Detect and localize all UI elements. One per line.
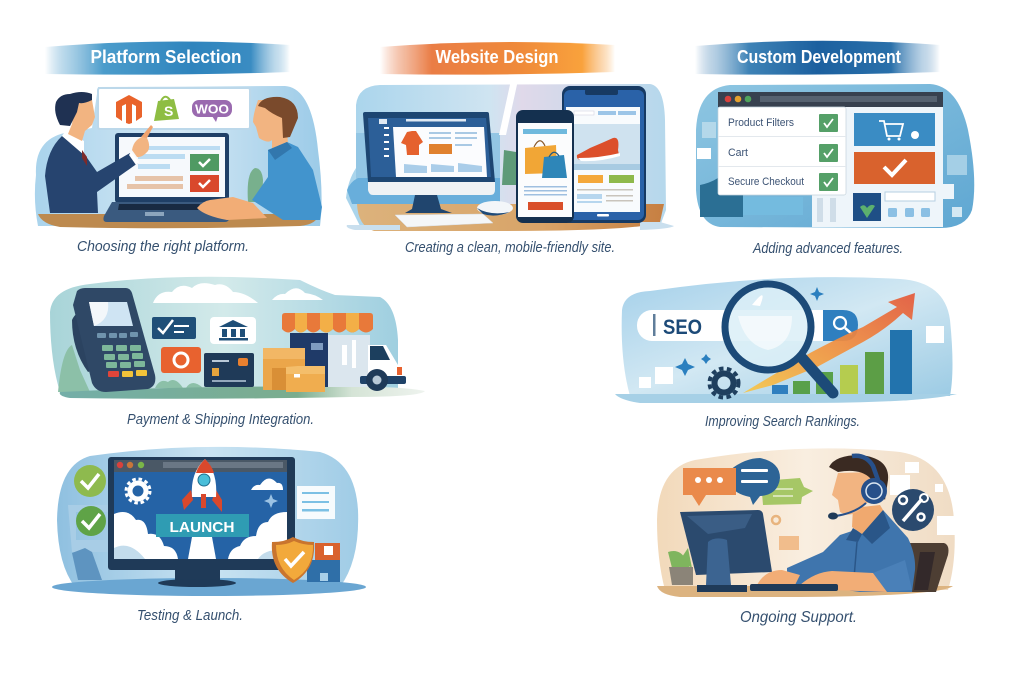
ground	[615, 394, 957, 403]
chat bubbles	[683, 458, 813, 506]
cardboard boxes	[263, 348, 325, 392]
heading: Custom Development	[695, 41, 940, 75]
caption: Ongoing Support.	[740, 609, 857, 626]
launch button	[156, 514, 249, 537]
icon: verified check card	[152, 317, 196, 339]
illustration background	[50, 277, 398, 392]
icon: gear	[710, 368, 738, 398]
caption: Choosing the right platform.	[77, 238, 249, 255]
panel: platform selection	[35, 41, 322, 255]
icon: shopify bag: S	[164, 103, 173, 119]
illustration background	[657, 448, 955, 590]
keyboard	[395, 214, 493, 227]
heading: Website Design	[380, 42, 615, 75]
illustration background	[346, 84, 666, 226]
books backdrop	[68, 505, 108, 580]
caption: Creating a clean, mobile-friendly site.	[405, 239, 615, 256]
arrow	[743, 293, 915, 393]
monitor	[108, 457, 295, 587]
desk	[38, 214, 318, 228]
computer monitor	[680, 510, 772, 592]
platform logos panel	[98, 88, 250, 129]
heading: Platform Selection: Platform Selection	[90, 47, 242, 67]
illustration background	[696, 84, 974, 228]
icon: rocket	[182, 459, 222, 512]
desktop monitor	[363, 112, 495, 213]
browser window	[718, 92, 954, 227]
caption: Improving Search Rankings.	[705, 413, 860, 430]
icon: security shield	[272, 537, 314, 583]
panel: seo	[615, 277, 957, 430]
foliage	[58, 345, 203, 392]
clouds	[153, 283, 323, 303]
panel: ongoing support	[657, 448, 958, 626]
illustration background	[35, 86, 322, 226]
document card	[297, 486, 335, 519]
white squares and sparkles	[639, 287, 944, 388]
magnifying glass	[725, 284, 833, 393]
feature checklist	[718, 107, 846, 195]
support agent	[757, 455, 948, 592]
icon: woo logo	[192, 100, 232, 122]
icon: woo logo: WOO	[195, 102, 229, 116]
caption: Adding advanced features.	[752, 240, 903, 257]
desk	[657, 586, 953, 597]
icon: gear	[126, 479, 150, 503]
heading: Website Design: Website Design	[436, 47, 558, 67]
illustration background	[57, 447, 358, 587]
feature checklist: Secure Checkout	[728, 176, 804, 188]
launch button: LAUNCH	[170, 519, 234, 536]
feature checklist: Product Filters	[728, 117, 794, 129]
desk	[357, 204, 664, 231]
payment terminal	[72, 288, 155, 392]
plant	[502, 150, 516, 185]
mouse	[477, 201, 513, 216]
panel: testing and launch	[52, 447, 366, 624]
plant	[248, 168, 263, 202]
panel: website design	[346, 42, 674, 256]
bar chart	[772, 330, 912, 394]
lower left blocks	[697, 122, 967, 217]
plant and pot	[668, 548, 693, 585]
figure: consultant pointing	[45, 92, 153, 213]
panel: payment and shipping	[50, 277, 425, 428]
keyboard	[750, 584, 838, 591]
ground	[52, 578, 366, 596]
feature checklist: Cart	[728, 147, 748, 159]
icon: credit card	[204, 353, 254, 387]
search bar	[637, 310, 858, 341]
illustration background	[622, 277, 952, 396]
icon: shopify bag	[154, 97, 179, 121]
laptop	[103, 133, 229, 222]
figure: client	[197, 97, 322, 220]
caption: Payment & Shipping Integration.	[127, 411, 314, 428]
heading: Custom Development: Custom Development	[737, 47, 901, 67]
heading: Platform Selection	[45, 41, 290, 75]
panel: custom development	[695, 41, 974, 257]
phone	[516, 110, 574, 223]
test check badges	[74, 465, 106, 536]
icon: tools badge	[892, 489, 934, 531]
caption: Testing & Launch.	[137, 607, 243, 624]
icon: bank	[210, 317, 256, 344]
icon: payment app tile	[161, 347, 201, 373]
icon: cloud	[251, 478, 283, 490]
ground	[60, 387, 425, 399]
icon: magento logo	[116, 95, 142, 124]
tablet	[562, 86, 646, 223]
box stack	[307, 543, 340, 582]
storefront truck	[282, 313, 406, 391]
background squares	[772, 462, 958, 550]
search bar: SEO	[663, 316, 702, 339]
white divider slash	[499, 80, 518, 135]
